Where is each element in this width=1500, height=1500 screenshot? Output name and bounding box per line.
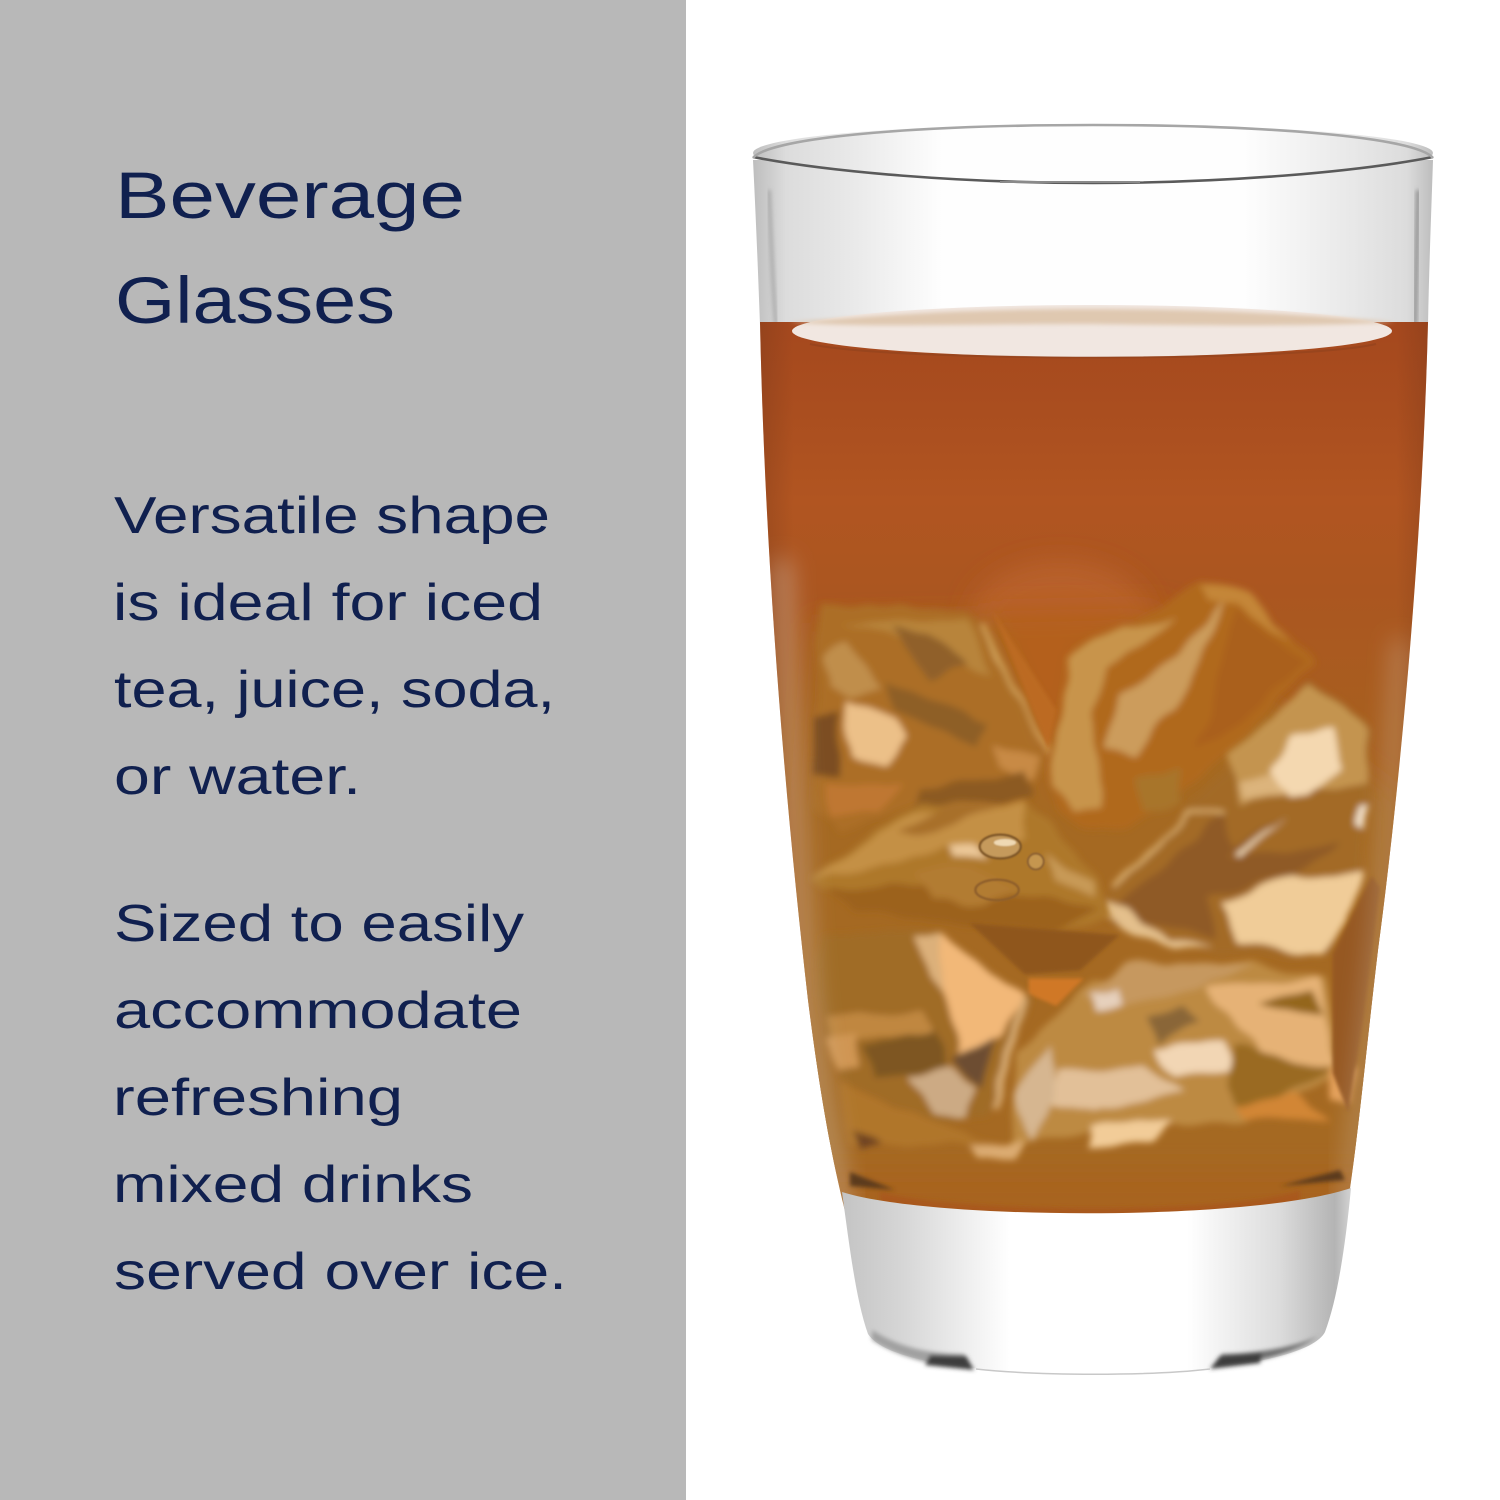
- text block: sized to accommodate: accommodate: [114, 982, 522, 1040]
- cube: right: [1100, 678, 1370, 955]
- drinking glass with iced tea: [750, 124, 1440, 1375]
- glass upper wall: [753, 160, 1433, 325]
- panel: grey text column: [0, 0, 686, 1500]
- glass base: [842, 1188, 1351, 1375]
- right edge of the ice pile: [1333, 876, 1380, 1113]
- title: [115, 158, 465, 337]
- ice bubbles: [975, 835, 1044, 900]
- title: Beverage: [115, 158, 465, 232]
- dark corners of liquid: [850, 1170, 1345, 1190]
- rim opening: [753, 124, 1433, 182]
- ice cubes, drawn in zoom coordinates: [804, 584, 1396, 1168]
- text block: sized to accommodate: mixed drinks: [113, 1156, 473, 1214]
- cube: bottom left: [819, 931, 1033, 1124]
- text block: versatile shape: Versatile shape: [114, 487, 550, 545]
- base foot shadows: [872, 1330, 1318, 1370]
- glass wall edge lines: [769, 190, 1418, 325]
- text block: versatile shape: is ideal for iced: [113, 574, 543, 632]
- cube: bottom right: [1009, 963, 1356, 1148]
- title: Glasses: [115, 263, 395, 337]
- text block: versatile shape: tea, juice, soda,: [114, 661, 555, 719]
- rim front and back edges: [753, 125, 1433, 183]
- text block: versatile shape: [113, 487, 555, 806]
- dark gap between cubes: [969, 611, 1119, 1006]
- cube: top right: [1048, 584, 1317, 828]
- text block: versatile shape: or water.: [114, 748, 361, 806]
- liquid: [750, 320, 1440, 1222]
- liquid surface: [790, 305, 1395, 358]
- glass edge tint: [782, 560, 846, 1215]
- text block: sized to accommodate: served over ice.: [114, 1243, 567, 1301]
- bottom ice and pool: [839, 1085, 1025, 1160]
- text block: sized to accommodate: Sized to easily: [114, 895, 524, 953]
- text block: sized to accommodate: refreshing: [113, 1069, 403, 1127]
- text block: sized to accommodate: [113, 895, 567, 1301]
- cube: centre with bubbles: [812, 801, 1108, 935]
- bottom band of liquid: [882, 1192, 1298, 1213]
- soft orange bloom behind ice: [981, 566, 1134, 612]
- cube: top left: [816, 603, 1052, 836]
